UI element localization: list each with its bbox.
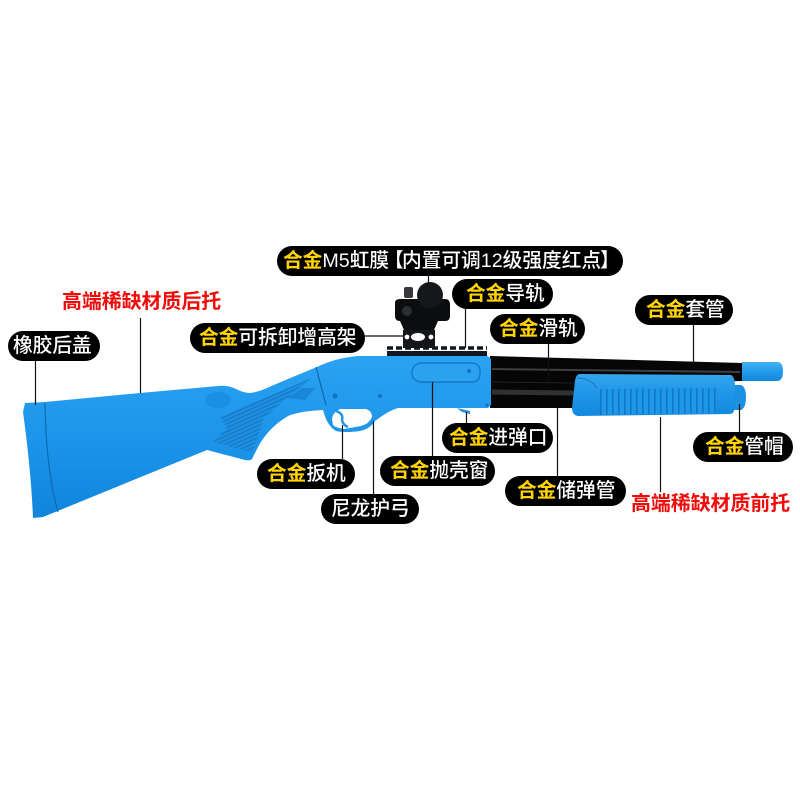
label: M5 sight: 内置可调12级强度红点 bbox=[402, 250, 601, 272]
label: M5 sight: 合金M5虹膜 bbox=[283, 250, 389, 272]
label: tube cap bbox=[693, 432, 793, 462]
label: trigger: 合金扳机 bbox=[267, 462, 346, 485]
label: M5 sight: 】 bbox=[600, 250, 620, 272]
label: M5 sight bbox=[277, 246, 623, 276]
receiver pins bbox=[332, 369, 489, 407]
forend bbox=[572, 374, 735, 416]
red dot sight bbox=[395, 282, 450, 348]
label: loading port bbox=[442, 423, 553, 453]
label: rubber butt cover bbox=[8, 331, 100, 361]
receiver seam bbox=[316, 367, 326, 405]
label: magazine tube: 合金储弹管 bbox=[517, 479, 615, 502]
gun illustration bbox=[23, 282, 783, 518]
label: slide rail bbox=[490, 314, 585, 344]
label: tube cap: 合金管帽 bbox=[705, 435, 784, 458]
trigger bbox=[336, 411, 348, 427]
label: magazine tube bbox=[505, 476, 626, 506]
barrel sleeve tip bbox=[742, 362, 783, 381]
label: detachable riser: 合金可拆卸增高架 bbox=[199, 326, 356, 349]
label: trigger bbox=[257, 459, 355, 489]
label: nylon guard: 尼龙护弓 bbox=[331, 498, 410, 520]
loading gate bbox=[457, 408, 470, 414]
label: loading port: 合金进弹口 bbox=[449, 426, 547, 449]
label: guide rail bbox=[452, 279, 553, 309]
label: guide rail: 合金导轨 bbox=[466, 282, 545, 305]
label: nylon guard bbox=[321, 494, 419, 524]
label: front stock: 高端稀缺材质前托 bbox=[631, 491, 790, 515]
label: rubber butt cover: 橡胶后盖 bbox=[13, 335, 92, 357]
label: barrel sleeve bbox=[635, 295, 733, 325]
ejection window bbox=[412, 363, 480, 382]
leader lines bbox=[36, 276, 740, 494]
tube cap bbox=[733, 385, 746, 410]
label: ejection port: 合金抛壳窗 bbox=[390, 459, 488, 482]
label: detachable riser bbox=[190, 323, 365, 353]
label: M5 sight: 【 bbox=[384, 250, 404, 272]
label: slide rail: 合金滑轨 bbox=[499, 317, 578, 340]
butt plate seam bbox=[45, 403, 58, 512]
cheek shading bbox=[205, 392, 231, 408]
barrel and magazine tube bbox=[490, 356, 742, 408]
label: rear stock: 高端稀缺材质后托 bbox=[62, 289, 221, 313]
label: ejection port bbox=[380, 456, 495, 486]
rail bbox=[387, 348, 487, 356]
label: barrel sleeve: 合金套管 bbox=[646, 298, 725, 321]
stock and receiver bbox=[23, 356, 491, 518]
grip checkering bbox=[213, 378, 315, 452]
